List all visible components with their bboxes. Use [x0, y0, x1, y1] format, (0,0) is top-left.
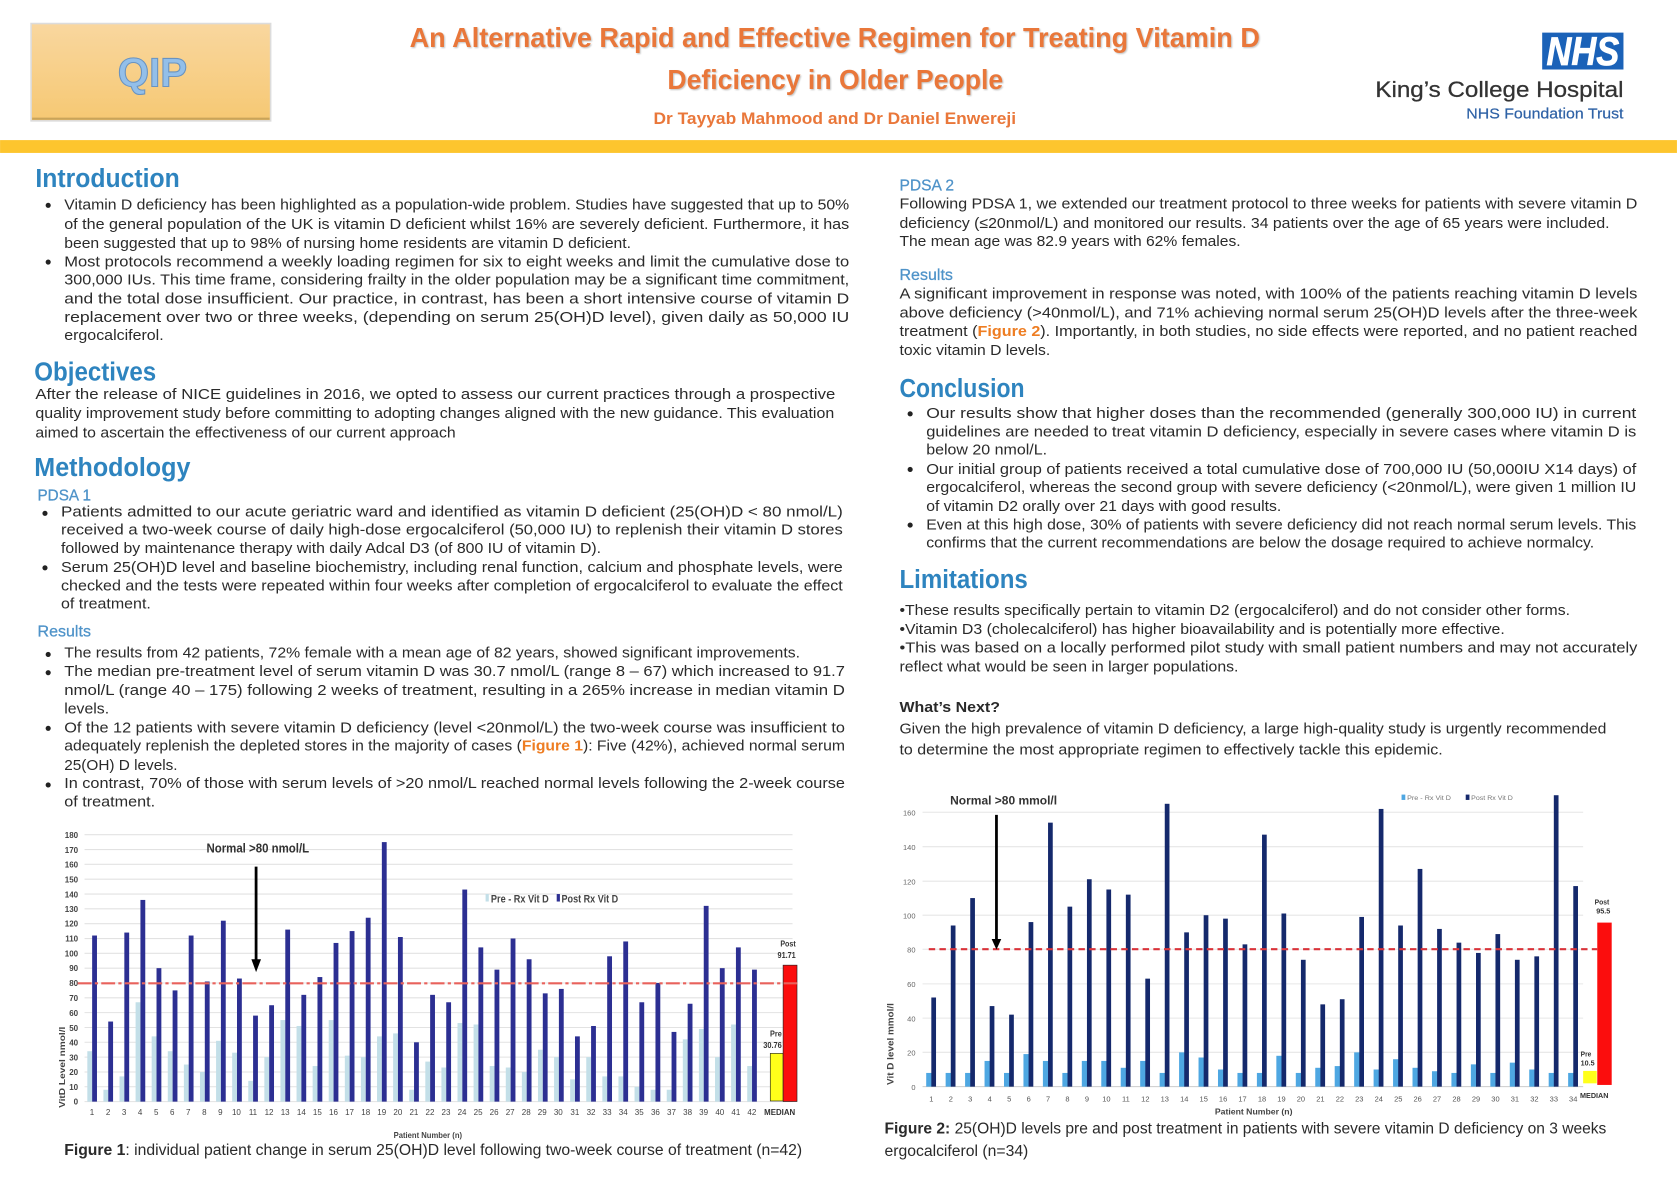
y axis labels: 30	[69, 1053, 79, 1062]
QIP badge: QIP	[118, 50, 187, 96]
bullet text: median level: The median pre-treatment level of serum vitamin D was 30.7 nmol/L (range 8 – 67) which increased to 91.7	[64, 663, 845, 680]
bullet text: protocols: 300,000 IUs. This time frame, considering frailty in the older population may be a significant time commitment,	[64, 271, 849, 288]
annotation: normal level: Normal >80 mmol/l	[950, 794, 1057, 808]
y axis labels: 40	[907, 1014, 915, 1023]
PDSA 2 results text: above deficiency (>40nmol/L), and 71% achieving normal serum 25(OH)D levels after the three-week	[899, 305, 1638, 322]
median bars	[770, 965, 797, 1102]
y axis labels: 150	[65, 875, 79, 884]
bullet text: severe deficiency: Of the 12 patients with severe vitamin D deficiency (level <20nmol/L) the two-week course was insufficient to	[64, 720, 845, 737]
x axis labels: 7	[186, 1108, 191, 1117]
bullet text: tests: of treatment.	[61, 596, 151, 613]
figure 1 caption: Figure 1: individual patient change in serum 25(OH)D level following two-week course of treatment (n=42)	[64, 1141, 802, 1159]
bullet text: cumulative dose	[908, 461, 1637, 515]
heading: Conclusion: Conclusion	[899, 375, 1025, 403]
axis title: vit D level: VitD Level nmol/l	[57, 1027, 67, 1108]
x axis labels: 12	[1141, 1095, 1149, 1104]
y axis labels: 140	[903, 843, 915, 852]
x axis labels: 37	[667, 1108, 676, 1117]
bullet text: prevalence: been suggested that up to 98% of nursing home residents are vitamin D deficient.	[64, 235, 631, 252]
legend	[486, 894, 618, 906]
bullet text: protocols	[46, 253, 849, 344]
PDSA 2 results text: toxic vitamin D levels.	[899, 342, 1050, 359]
authors: Dr Tayyab Mahmood and Dr Daniel Enwereji	[653, 109, 1016, 128]
x axis labels: 30	[554, 1108, 563, 1117]
y axis labels: 130	[65, 905, 79, 914]
y axis labels: 50	[69, 1024, 79, 1033]
x axis labels: 17	[345, 1108, 355, 1117]
x axis labels: 31	[1511, 1095, 1519, 1104]
chart: figure 1 individual patient change	[57, 831, 799, 1140]
bullet text: contrast: In contrast, 70% of those with serum levels of >20 nmol/L reached normal levels following the 2-week course	[64, 775, 845, 792]
x axis labels: 22	[1336, 1095, 1344, 1104]
objectives text: aimed to ascertain the effectiveness of our current approach	[35, 424, 456, 441]
x axis labels: 32	[587, 1108, 596, 1117]
arrow	[251, 867, 261, 972]
normal threshold line	[929, 948, 1597, 950]
title: An Alternative Rapid and Effective Regimen for Treating Vitamin D	[410, 22, 1260, 53]
x axis labels: 24	[458, 1108, 467, 1117]
post-treatment bars	[92, 842, 757, 1102]
objectives text	[35, 386, 835, 441]
bullet text: high dose: confirms that the current recommendations are below the dosage required to achieve normalcy.	[926, 535, 1594, 552]
x axis labels: 10	[1102, 1095, 1111, 1104]
bullet text: contrast: of treatment.	[64, 793, 155, 810]
what's next text	[899, 721, 1606, 758]
x axis labels: 24	[1375, 1095, 1383, 1104]
bullet text: tests	[42, 559, 844, 613]
bullet text: high dose	[908, 516, 1637, 552]
bullet text: higher doses: guidelines are needed to treat vitamin D deficiency, especially in severe cases where vitamin D is	[926, 423, 1637, 440]
limitations text	[899, 602, 1638, 676]
PDSA 2 text: deficiency (≤20nmol/L) and monitored our results. 34 patients over the age of 65 years were included.	[899, 215, 1610, 232]
x axis labels: 11	[249, 1108, 258, 1117]
x axis labels: 25	[1394, 1095, 1402, 1104]
x axis labels: 9	[1085, 1095, 1089, 1104]
x axis labels: 18	[1258, 1095, 1266, 1104]
x axis labels: 6	[170, 1108, 175, 1117]
header	[31, 22, 1623, 128]
title	[410, 22, 1260, 95]
y axis labels: 100	[65, 950, 79, 959]
x axis labels: 20	[393, 1108, 403, 1117]
objectives text: quality improvement study before committing to adopting changes aligned with the new guidance. This evaluation	[35, 405, 834, 422]
x axis labels: 6	[1027, 1095, 1031, 1104]
bullet text: tests: Serum 25(OH)D level and baseline biochemistry, including renal function, calcium and phosphate levels, were	[61, 559, 843, 576]
x axis labels: 13	[281, 1108, 290, 1117]
x axis labels: 11	[1122, 1095, 1130, 1104]
x axis labels: 27	[506, 1108, 515, 1117]
x axis labels: 42	[747, 1108, 757, 1117]
bullet text: high dose: Even at this high dose, 30% of patients with severe deficiency did not reach normal serum levels. This	[926, 516, 1637, 533]
x axis labels: 3	[968, 1095, 972, 1104]
median value labels: Post	[780, 938, 796, 948]
legend: Post Rx Vit D	[1471, 795, 1513, 802]
x axis labels: 15	[1200, 1095, 1208, 1104]
y axis labels: 120	[65, 920, 79, 929]
x axis labels: 1	[929, 1095, 933, 1104]
limitations text: •This was based on a locally performed pilot study with small patient numbers and may not accurately	[899, 639, 1638, 656]
x axis labels: 19	[1277, 1095, 1286, 1104]
median bars	[1583, 923, 1612, 1085]
bullet text: severe deficiency: adequately replenish the depleted stores in the majority of cases ( Figure 1): Five (42%), achieved normal serum	[64, 738, 845, 755]
x axis labels: 26	[1413, 1095, 1422, 1104]
median value labels: 10.5	[1581, 1059, 1595, 1068]
y axis labels: 20	[69, 1068, 79, 1077]
x axis labels: 40	[715, 1108, 725, 1117]
x axis labels: 2	[949, 1095, 953, 1104]
x axis labels: 21	[409, 1108, 419, 1117]
x axis labels: 12	[265, 1108, 274, 1117]
bullet text: higher doses: below 20 nmol/L.	[926, 442, 1047, 459]
y axis labels: 60	[907, 980, 915, 989]
panel: conclusion	[899, 375, 1637, 552]
bullet text: median level	[46, 663, 845, 717]
what's next text: to determine the most appropriate regimen to effectively tackle this epidemic.	[899, 741, 1443, 758]
median value labels: 30.76	[763, 1040, 782, 1050]
y axis labels: 100	[903, 911, 915, 920]
figure 2 caption	[884, 1120, 1606, 1160]
x axis labels: 14	[1180, 1095, 1188, 1104]
bullet text: treatment course: Patients admitted to our acute geriatric ward and identified as vitamin D deficient (25(OH)D < 80 nmol/L)	[61, 504, 843, 521]
panel: methodology	[34, 454, 845, 810]
bullet text: prevalence: Vitamin D deficiency has been highlighted as a population-wide problem. Studies have suggested that up to 50%	[64, 197, 849, 214]
x axis labels: 3	[122, 1108, 127, 1117]
panel: limitations	[899, 566, 1638, 676]
bullet text: cumulative dose: ergocalciferol, whereas the second group with severe deficiency (<20nmol/L), were given 1 million IU	[926, 479, 1636, 496]
median value labels: 91.71	[778, 950, 796, 960]
x axis labels: 41	[731, 1108, 741, 1117]
x axis labels: 5	[1007, 1095, 1011, 1104]
bullet text: cumulative dose: of vitamin D2 orally over 21 days with good results.	[926, 498, 1281, 515]
median value labels	[763, 938, 796, 1117]
bullet text: treatment course	[42, 504, 843, 557]
pre-treatment bars	[87, 1002, 752, 1102]
x axis labels: 23	[442, 1108, 451, 1117]
y axis labels: 110	[65, 935, 79, 944]
panel: PDSA 2	[899, 177, 1638, 359]
x axis labels: 25	[474, 1108, 483, 1117]
y axis labels: 180	[65, 831, 79, 840]
PDSA 2 text: The mean age was 82.9 years with 62% females.	[899, 233, 1241, 250]
PDSA 2 text: Following PDSA 1, we extended our treatment protocol to three weeks for patients with severe vitamin D	[899, 196, 1637, 213]
bullet text: protocols: and the total dose insufficient. Our practice, in contrast, has been a short intensive course of vitamin D	[64, 291, 849, 308]
PDSA 2 results text: A significant improvement in response was noted, with 100% of the patients reaching vitamin D levels	[899, 285, 1638, 302]
subheading: Results: Results	[899, 267, 953, 284]
x axis labels: 2	[106, 1108, 111, 1117]
x axis labels: 38	[683, 1108, 693, 1117]
axis title: patient number: Patient Number (n)	[394, 1130, 462, 1140]
bullet text: prevalence: of the general population of the UK is vitamin D deficient whilst 16% are severely deficient. Furthermore, it has	[64, 216, 850, 233]
axis title: vit D level: Vit D level mmol/l	[886, 1003, 896, 1085]
heading: Objectives: Objectives	[34, 359, 156, 387]
title: Deficiency in Older People	[667, 64, 1003, 95]
y axis labels	[903, 808, 915, 1092]
PDSA 2 results text	[899, 285, 1638, 359]
x axis labels: 39	[699, 1108, 709, 1117]
chart: figure 2 pre and post treatment	[886, 794, 1612, 1116]
legend: Pre - Rx Vit D	[1407, 795, 1451, 802]
objectives text: After the release of NICE guidelines in 2016, we opted to assess our current practices through a prospective	[35, 386, 835, 403]
limitations text: •These results specifically pertain to vitamin D2 (ergocalciferol) and do not consider other forms.	[899, 602, 1570, 619]
y axis labels: 170	[65, 846, 79, 855]
bullet text: treatment course: followed by maintenance therapy with daily Adcal D3 (of 800 IU of vitamin D).	[61, 540, 601, 557]
y axis labels: 10	[69, 1083, 79, 1092]
x axis labels: 32	[1530, 1095, 1539, 1104]
bullet text: severe deficiency: 25(OH) D levels.	[64, 757, 178, 774]
x axis labels: 34	[619, 1108, 628, 1117]
bullet text: results from 42 patients: The results from 42 patients, 72% female with a mean age of 82 years, showed significant improvements.	[64, 645, 800, 662]
y axis labels: 0	[911, 1083, 915, 1092]
x axis labels: 15	[313, 1108, 322, 1117]
x axis labels: 4	[138, 1108, 143, 1117]
x axis labels: 9	[218, 1108, 223, 1117]
bullet text: prevalence	[46, 197, 850, 252]
x axis labels: 35	[635, 1108, 644, 1117]
limitations text: •Vitamin D3 (cholecalciferol) has higher bioavailability and is potentially more effective.	[899, 621, 1505, 638]
y axis labels: 120	[903, 877, 915, 886]
x axis labels: 28	[1452, 1095, 1461, 1104]
x axis labels: 22	[426, 1108, 435, 1117]
x axis labels: 20	[1297, 1095, 1305, 1104]
x axis labels: 21	[1316, 1095, 1325, 1104]
x axis labels: 36	[651, 1108, 660, 1117]
NHS logo: NHS	[1546, 30, 1619, 74]
bullet text: median level: nmol/L (range 40 – 175) following 2 weeks of treatment, resulting in a 265% increase in median vitamin D	[64, 682, 845, 699]
x axis labels: 34	[1569, 1095, 1577, 1104]
bullet text: higher doses	[908, 405, 1637, 459]
arrow	[992, 815, 1001, 950]
y axis labels: 80	[69, 979, 79, 988]
x axis labels: 33	[603, 1108, 612, 1117]
x axis labels: 31	[570, 1108, 580, 1117]
x axis labels: 16	[329, 1108, 339, 1117]
panel: what's next	[899, 699, 1606, 758]
what's next text: Given the high prevalence of vitamin D deficiency, a large high-quality study is urgently recommended	[899, 721, 1606, 738]
legend: Post Rx Vit D	[562, 894, 618, 906]
bullet text: median level: levels.	[64, 700, 109, 717]
bullet text: higher doses: Our results show that higher doses than the recommended (generally 300,000 IU) in current	[926, 405, 1637, 422]
NHS logo	[1375, 30, 1623, 123]
x axis labels: 8	[202, 1108, 207, 1117]
x axis labels: 8	[1065, 1095, 1070, 1104]
x axis labels: 29	[538, 1108, 547, 1117]
bullet text: tests: checked and the tests were repeated within four weeks after completion of ergocalciferol to evaluate the effect	[61, 577, 844, 594]
QIP badge	[31, 24, 271, 121]
x axis labels: 18	[361, 1108, 371, 1117]
heading: Methodology: Methodology	[34, 454, 191, 482]
x axis labels: 26	[490, 1108, 499, 1117]
subheading: PDSA 2: PDSA 2	[899, 177, 954, 194]
annotation: normal level: Normal >80 nmol/L	[206, 840, 309, 855]
subheading: Results: Results	[37, 623, 91, 640]
x axis labels: 13	[1161, 1095, 1169, 1104]
PDSA 2 results text: treatment ( Figure 2 ). Importantly, in both studies, no side effects were reported, and no patient reached	[899, 323, 1637, 340]
median value labels: MEDIAN	[1580, 1091, 1608, 1100]
bullet text: protocols: ergocalciferol.	[64, 327, 164, 344]
NHS logo: NHS Foundation Trust	[1466, 107, 1623, 123]
legend	[1402, 795, 1513, 802]
median value labels: MEDIAN	[764, 1107, 795, 1117]
x axis labels: 23	[1355, 1095, 1363, 1104]
subheading: PDSA 1: PDSA 1	[37, 487, 91, 504]
y axis labels: 0	[74, 1098, 79, 1107]
median value labels: Pre	[770, 1028, 782, 1038]
x axis labels: 28	[522, 1108, 531, 1117]
panel: introduction	[35, 165, 850, 344]
x axis labels: 27	[1433, 1095, 1441, 1104]
post-treatment bars	[931, 795, 1578, 1087]
y axis labels: 80	[907, 945, 915, 954]
x axis labels: 10	[232, 1108, 241, 1117]
x axis labels: 4	[988, 1095, 992, 1104]
bullet text: treatment course: received a two-week course of daily high-dose ergocalciferol (50,000 IU) to replenish their vitamin D stores	[61, 522, 843, 539]
y axis labels: 60	[69, 1009, 79, 1018]
x axis labels: 5	[154, 1108, 159, 1117]
pre-treatment bars	[926, 1052, 1574, 1087]
median value labels: Pre	[1581, 1050, 1591, 1059]
PDSA 2 text	[899, 196, 1637, 250]
bullet text: protocols: replacement over two or three weeks, (depending on serum 25(OH)D level), given daily as 50,000 IU	[64, 309, 849, 326]
heading: Introduction: Introduction	[35, 165, 180, 193]
normal threshold line	[78, 982, 799, 984]
x axis labels: 29	[1472, 1095, 1480, 1104]
NHS logo: King’s College Hospital	[1375, 77, 1623, 102]
y axis labels: 40	[69, 1038, 79, 1047]
y axis labels: 90	[69, 964, 79, 973]
x axis labels: 14	[297, 1108, 306, 1117]
y axis labels: 160	[65, 860, 79, 869]
panel: objectives	[34, 359, 835, 441]
x axis labels	[90, 1108, 757, 1117]
x axis labels: 30	[1491, 1095, 1500, 1104]
median value labels: Post	[1595, 898, 1610, 907]
x axis labels: 17	[1238, 1095, 1247, 1104]
bullet text: protocols: Most protocols recommend a weekly loading regimen for six to eight weeks and limit the cumulative dose to	[64, 253, 849, 270]
y axis labels: 20	[907, 1049, 915, 1058]
y axis labels: 70	[69, 994, 79, 1003]
bullet text: cumulative dose: Our initial group of patients received a total cumulative dose of 700,000 IU (50,000IU X14 days) of	[926, 461, 1637, 478]
bullet text: contrast	[46, 775, 845, 810]
x axis labels	[929, 1095, 1577, 1104]
yellow divider band	[0, 140, 1677, 153]
median value labels: 95.5	[1596, 906, 1610, 915]
y axis labels: 140	[65, 890, 79, 899]
y axis labels	[65, 831, 79, 1107]
axis title: patient number: Patient Number (n)	[1215, 1106, 1293, 1116]
figure 2 caption: ergocalciferol (n=34)	[884, 1142, 1028, 1160]
y axis labels: 160	[903, 808, 915, 817]
x axis labels: 1	[90, 1108, 95, 1117]
figure 2 caption: Figure 2: 25(OH)D levels pre and post treatment in patients with severe vitamin D deficiency on 3 weeks	[884, 1120, 1606, 1138]
x axis labels: 7	[1046, 1095, 1050, 1104]
x axis labels: 19	[377, 1108, 387, 1117]
limitations text: reflect what would be seen in larger populations.	[899, 659, 1238, 676]
median value labels	[1580, 898, 1610, 1100]
x axis labels: 16	[1219, 1095, 1227, 1104]
heading: Limitations: Limitations	[899, 566, 1028, 594]
bullet text: severe deficiency	[46, 720, 845, 774]
x axis labels: 33	[1550, 1095, 1558, 1104]
heading: What's Next: What’s Next?	[899, 699, 1000, 716]
legend: Pre - Rx Vit D	[491, 894, 549, 906]
